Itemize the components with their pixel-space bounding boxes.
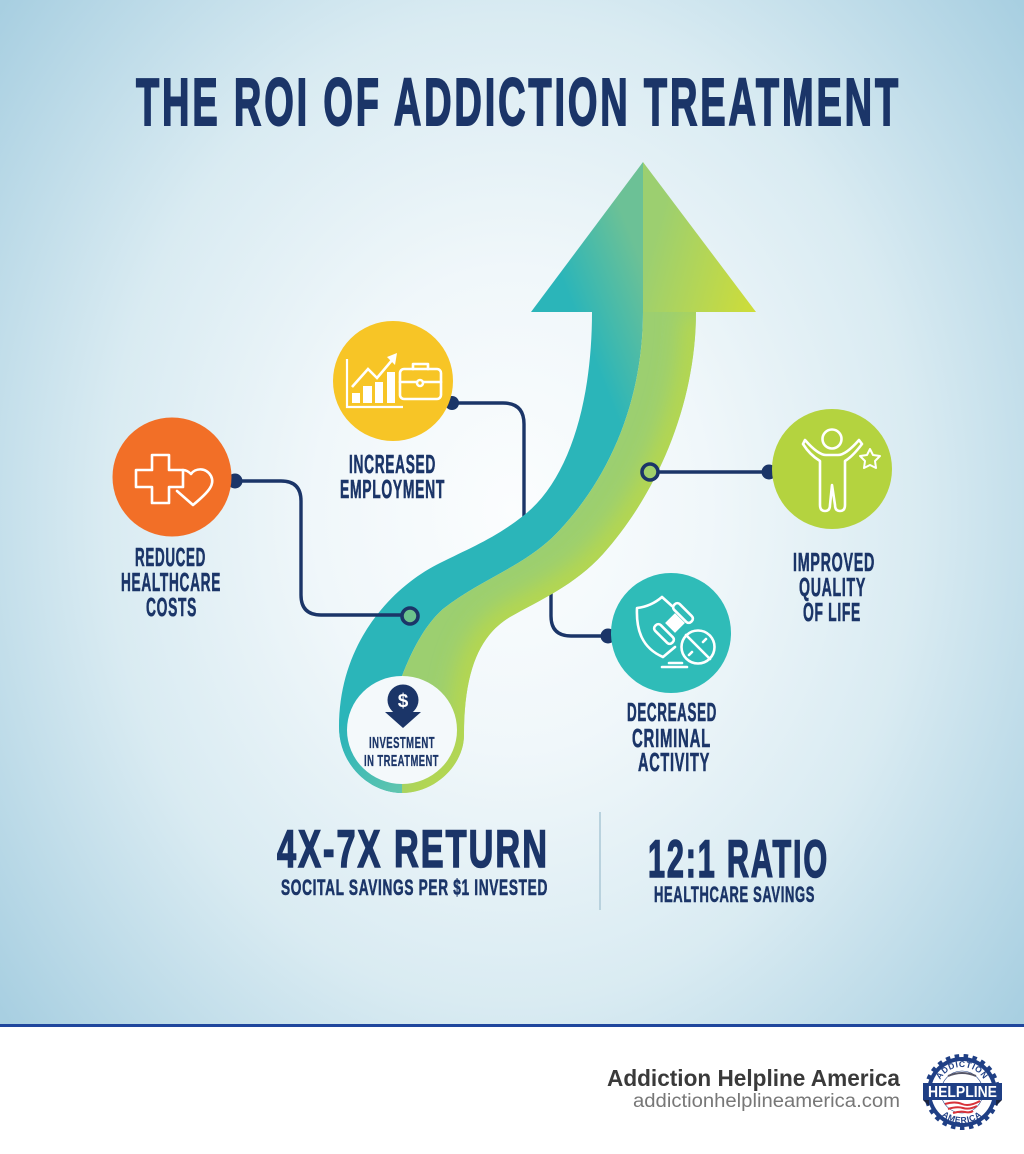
footer: [0, 1024, 1024, 1130]
arrow green side: [390, 162, 756, 800]
label: [627, 697, 717, 777]
icon: person and star: [803, 430, 880, 511]
label: DECREASED: [627, 697, 717, 727]
stat: 4x-7x return: 4X-7X RETURN: [277, 820, 549, 879]
connector: increased employment: [452, 403, 610, 636]
brand name: Addiction Helpline America: [607, 1065, 900, 1091]
label: REDUCED: [135, 542, 206, 572]
logo seal: AMERICA: [942, 1112, 982, 1123]
label: EMPLOYMENT: [340, 474, 445, 504]
icon: briefcase: [400, 364, 441, 399]
label: investment in treatment: INVESTMENT: [369, 735, 435, 752]
icon: shield and gavel: [637, 597, 714, 667]
panel: increased employment: [333, 321, 453, 504]
start circle: investment in treatment: [347, 676, 457, 784]
label: INCREASED: [349, 449, 436, 479]
icon: dollar down arrow: $: [398, 691, 409, 712]
growth arrow: [330, 162, 756, 800]
brand url: addictionhelplineamerica.com: [633, 1091, 900, 1112]
label: HEALTHCARE: [121, 567, 221, 597]
connector: reduced healthcare costs: [228, 474, 418, 624]
icon: cross and heart: [136, 455, 212, 505]
logo seal: ADDICTION: [936, 1061, 988, 1080]
arrow teal side: [330, 162, 650, 800]
label: QUALITY: [799, 572, 866, 602]
icon: chart: [347, 353, 403, 407]
footer white band: [0, 1025, 1024, 1154]
label: [793, 547, 875, 627]
orange circle: [112, 418, 232, 536]
stat: 12:1 ratio: HEALTHCARE SAVINGS: [654, 882, 815, 907]
stat: 12:1 ratio: 12:1 RATIO: [648, 830, 829, 889]
connector: improved quality of life: [642, 464, 776, 480]
yellow circle: [333, 321, 453, 441]
label: OF LIFE: [803, 597, 861, 627]
stat: 4x-7x return: SOCITAL SAVINGS PER $1 INVESTED: [281, 875, 548, 900]
connector dots: [445, 396, 616, 644]
logo seal: [923, 1054, 1002, 1130]
green circle: [772, 409, 892, 529]
panel: reduced healthcare costs: [112, 418, 232, 622]
panel: decreased criminal activity: [611, 573, 731, 777]
label: IMPROVED: [793, 547, 875, 577]
white disc: [347, 676, 457, 784]
teal circle: [611, 573, 731, 693]
logo seal: HELPLINE: [928, 1084, 997, 1101]
panel: improved quality of life: [772, 409, 892, 627]
label: [121, 542, 221, 622]
label: ACTIVITY: [638, 747, 710, 777]
label: [340, 449, 445, 504]
label: investment in treatment: [364, 735, 439, 770]
stat: 12:1 ratio: [648, 830, 829, 907]
label: COSTS: [146, 592, 197, 622]
label: investment in treatment: IN TREATMENT: [364, 753, 439, 770]
stat: 4x-7x return: [277, 820, 549, 900]
label: CRIMINAL: [632, 723, 711, 753]
